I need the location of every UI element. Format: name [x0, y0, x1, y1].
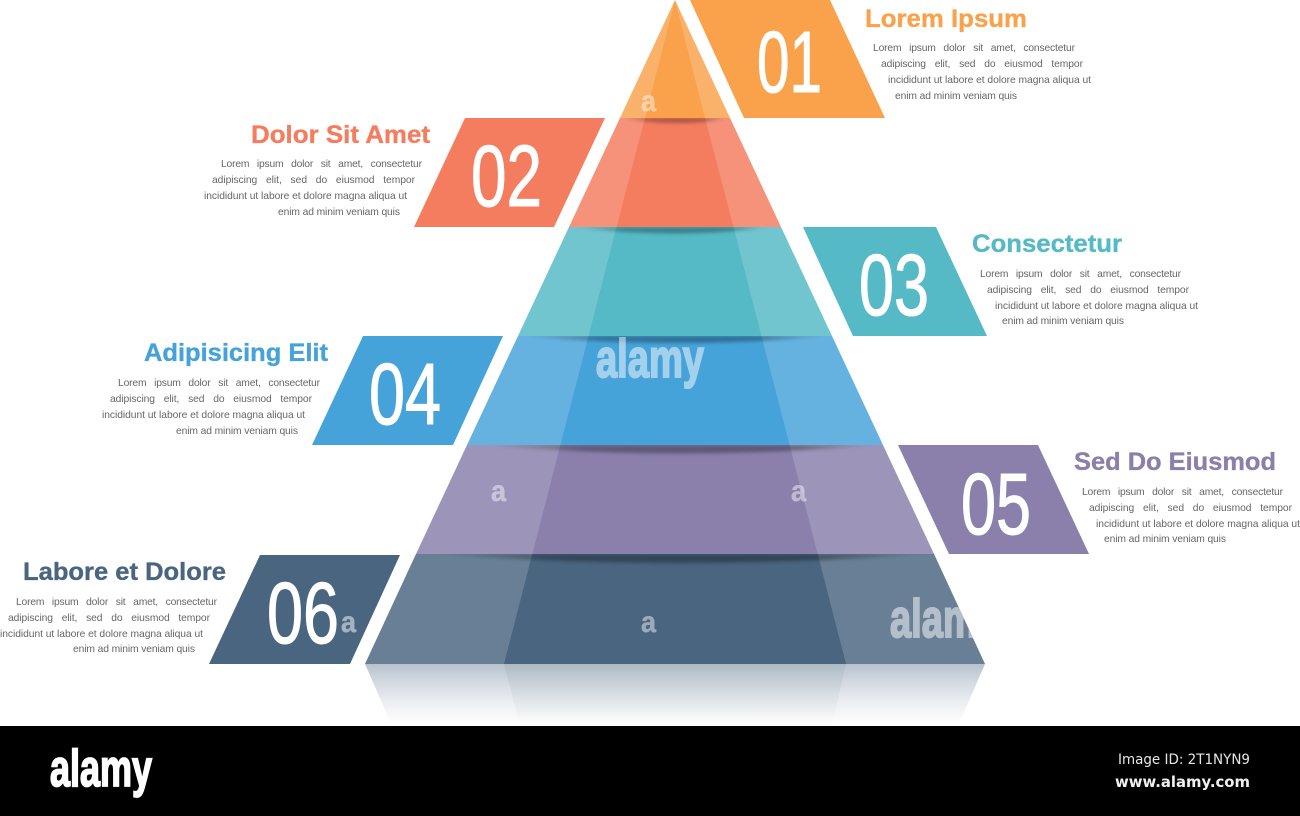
- tab 02: 02: [471, 128, 542, 225]
- text block 06: Labore et Dolore: [23, 558, 226, 586]
- tab 02: [414, 118, 605, 227]
- text block 01: enim ad minim veniam quis: [895, 91, 1017, 102]
- text block 02: incididunt ut labore et dolore magna aliqua ut: [204, 191, 407, 202]
- watermarks: a: [341, 606, 356, 639]
- website: www.alamy.com: [1115, 773, 1250, 791]
- text block 03: [972, 230, 1198, 327]
- text block 05: [1074, 448, 1300, 545]
- text block 03: Consectetur: [972, 230, 1122, 258]
- pyramid level 1: [620, 0, 730, 118]
- text block 03: adipiscing elit, sed do eiusmod tempor: [987, 285, 1190, 296]
- pyramid level 3: [518, 227, 832, 336]
- text block 02: Lorem ipsum dolor sit amet, consectetur: [221, 159, 423, 170]
- text block 02: enim ad minim veniam quis: [278, 207, 400, 218]
- tab 03: [803, 227, 987, 336]
- text block 02: Dolor Sit Amet: [251, 121, 431, 149]
- text block 04: enim ad minim veniam quis: [176, 426, 298, 437]
- text block 06: incididunt ut labore et dolore magna aliqua ut: [0, 629, 203, 640]
- text block 06: Lorem ipsum dolor sit amet, consectetur: [16, 597, 218, 608]
- text block 01: incididunt ut labore et dolore magna aliqua ut: [888, 75, 1091, 86]
- watermarks: a: [491, 475, 506, 508]
- text block 01: Lorem ipsum dolor sit amet, consectetur: [873, 43, 1076, 54]
- watermarks: alamy: [596, 329, 704, 389]
- tab 06: 06: [267, 565, 339, 662]
- text block 05: adipiscing elit, sed do eiusmod tempor: [1089, 503, 1293, 514]
- watermarks: [341, 85, 998, 649]
- tab 05: 05: [961, 456, 1031, 553]
- text block 06: [0, 558, 226, 655]
- text block 01: adipiscing elit, sed do eiusmod tempor: [881, 59, 1084, 70]
- text block 04: adipiscing elit, sed do eiusmod tempor: [110, 394, 313, 405]
- pyramid level 4: [467, 336, 883, 445]
- text block 03: incididunt ut labore et dolore magna aliqua ut: [995, 301, 1198, 312]
- tab 01: [690, 0, 885, 118]
- text block 06: enim ad minim veniam quis: [73, 644, 195, 655]
- pyramid level 5: [416, 445, 934, 554]
- footer bar: [0, 726, 1300, 816]
- watermarks: alamy: [890, 589, 998, 649]
- text block 01: Lorem Ipsum: [865, 5, 1027, 33]
- tab 01: 01: [757, 14, 822, 111]
- text block 04: Adipisicing Elit: [144, 339, 329, 367]
- tab 05: [898, 445, 1089, 554]
- tab 03: 03: [859, 237, 929, 334]
- text block 06: adipiscing elit, sed do eiusmod tempor: [8, 613, 211, 624]
- text block 04: incididunt ut labore et dolore magna aliqua ut: [102, 410, 305, 421]
- pyramid reflection: [365, 664, 985, 726]
- image id: Image ID: 2T1NYN9: [1118, 752, 1250, 768]
- text block 01: [865, 5, 1091, 102]
- text block 04: Lorem ipsum dolor sit amet, consectetur: [118, 378, 321, 389]
- text block 05: enim ad minim veniam quis: [1104, 534, 1226, 545]
- text block 04: [102, 339, 329, 437]
- watermarks: a: [791, 475, 806, 508]
- text block 05: Sed Do Eiusmod: [1074, 448, 1276, 476]
- watermarks: a: [641, 85, 656, 118]
- pyramid level 6: [365, 554, 985, 664]
- text block 05: Lorem ipsum dolor sit amet, consectetur: [1082, 487, 1284, 498]
- tab 06: [209, 555, 400, 664]
- tab 04: [312, 336, 503, 445]
- text block 03: enim ad minim veniam quis: [1002, 316, 1124, 327]
- text block 02: adipiscing elit, sed do eiusmod tempor: [212, 175, 416, 186]
- footer logo: alamy: [50, 740, 152, 798]
- text block 05: incididunt ut labore et dolore magna aliqua ut: [1096, 519, 1300, 530]
- pyramid level 2: [569, 118, 781, 227]
- pyramid: [365, 0, 985, 664]
- tab 04: 04: [369, 346, 441, 443]
- watermarks: a: [641, 606, 656, 639]
- text block 02: [204, 121, 431, 218]
- text block 03: Lorem ipsum dolor sit amet, consectetur: [980, 269, 1182, 280]
